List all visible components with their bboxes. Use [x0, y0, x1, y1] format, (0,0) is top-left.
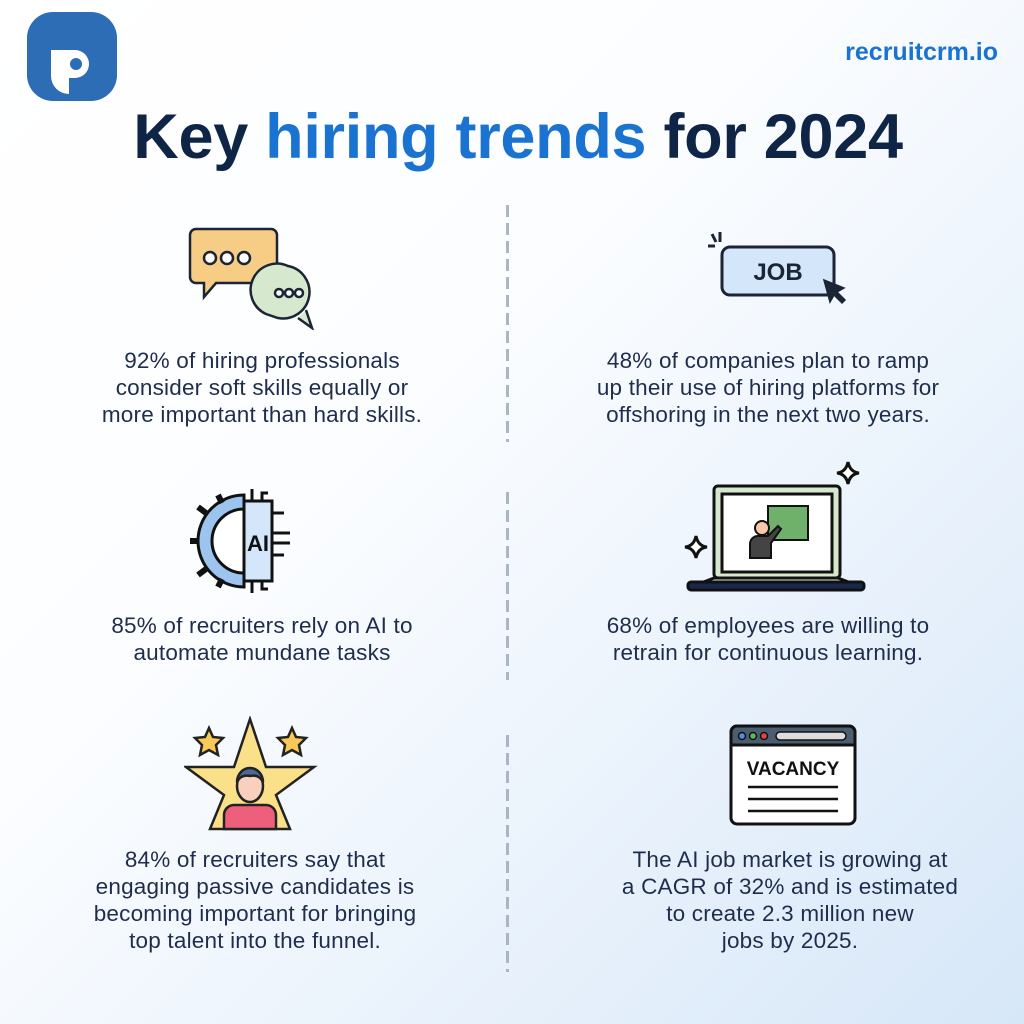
text: AI: automate mundane tasks	[133, 640, 391, 665]
text: AI job market: The AI job market is growing at	[632, 847, 948, 872]
icon: job button	[708, 232, 846, 304]
icon: AI gear	[190, 489, 290, 593]
text: soft skills	[102, 348, 422, 427]
icon: job button: JOB	[753, 259, 803, 286]
icon: AI gear: AI	[247, 531, 269, 556]
text: hiring platforms	[597, 348, 939, 427]
icon: star candidate	[184, 716, 318, 830]
text: AI job market: jobs by 2025.	[722, 928, 858, 953]
text: retrain: 68% of employees are willing to	[607, 613, 929, 638]
text: passive candidates	[94, 847, 416, 953]
text: retrain: retrain for continuous learning.	[613, 640, 923, 665]
text: AI job market: to create 2.3 million new	[666, 901, 914, 926]
text: soft skills: 92% of hiring professionals	[124, 348, 400, 373]
icon: chat bubbles	[188, 228, 314, 330]
text: hiring platforms: 48% of companies plan to ramp	[607, 348, 929, 373]
text: AI job market	[622, 847, 958, 953]
icon: vacancy window	[730, 724, 856, 826]
text: hiring platforms: offshoring in the next two years.	[606, 402, 930, 427]
text: passive candidates: top talent into the funnel.	[129, 928, 381, 953]
title: Key hiring trends for 2024	[133, 102, 903, 172]
text: AI	[111, 613, 413, 665]
website url: recruitcrm.io	[845, 38, 998, 66]
text: hiring platforms: up their use of hiring platforms for	[597, 375, 939, 400]
logo	[27, 12, 117, 101]
text: passive candidates: 84% of recruiters say that	[125, 847, 385, 872]
text: retrain	[607, 613, 929, 665]
text: passive candidates: engaging passive candidates is	[96, 874, 414, 899]
text: AI job market: a CAGR of 32% and is estimated	[622, 874, 958, 899]
text: soft skills: more important than hard skills.	[102, 402, 422, 427]
text: passive candidates: becoming important for bringing	[94, 901, 416, 926]
icon: vacancy window: VACANCY	[747, 759, 840, 780]
icon: laptop training	[684, 462, 866, 592]
text: AI: 85% of recruiters rely on AI to	[111, 613, 413, 638]
text: soft skills: consider soft skills equally or	[116, 375, 408, 400]
